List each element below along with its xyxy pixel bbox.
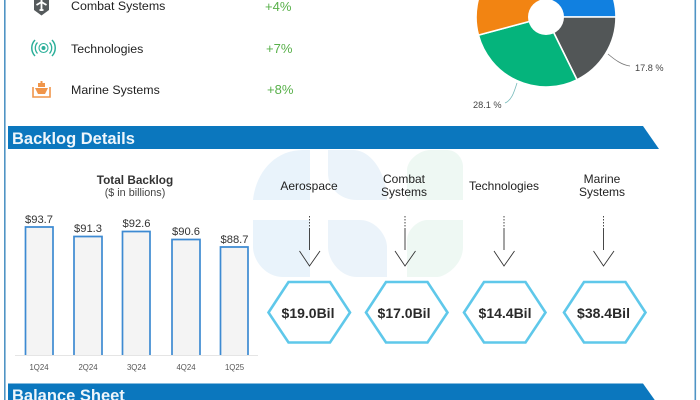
row: Marine Systems (33, 81, 294, 97)
bar: 1Q24 (25, 214, 53, 372)
hexagon value: $14.4Bil (479, 305, 531, 321)
icon: ship (33, 81, 50, 97)
column: Technologies (464, 179, 546, 342)
row: Marine Systems: Marine Systems (71, 83, 160, 97)
row: Marine Systems: +8% (267, 82, 294, 97)
icon: signal (32, 40, 55, 56)
bar: 1Q24: $93.7 (25, 214, 53, 226)
row: Combat Systems (34, 0, 292, 16)
hexagon value: $19.0Bil (282, 305, 334, 321)
icon: shield with plane (34, 0, 49, 16)
column: Combat Systems (366, 172, 448, 342)
bar chart: total backlog (15, 173, 258, 372)
heading: Balance Sheet (8, 384, 659, 400)
bar: 4Q24 (172, 226, 200, 372)
column: Marine Systems (564, 172, 646, 342)
arrow (494, 216, 514, 266)
bar: 1Q25 (220, 234, 248, 372)
column: Marine Systems: Marine (584, 172, 621, 186)
bar: 1Q25: $88.7 (220, 234, 248, 246)
chart title: Total Backlog (97, 173, 173, 187)
bar: 1Q24: 1Q24 (29, 363, 49, 372)
hexagon value (464, 282, 546, 342)
column: Combat Systems: Systems (381, 185, 427, 199)
pie chart: segment share (473, 0, 664, 110)
bar: 4Q24: $90.6 (172, 226, 200, 238)
column: Aerospace: Aerospace (280, 179, 338, 193)
chart title: ($ in billions) (105, 187, 165, 199)
column: Marine Systems: Systems (579, 185, 625, 199)
column: Combat Systems: Combat (383, 172, 426, 186)
slice: green 28.1% (478, 17, 577, 87)
arrow (594, 216, 614, 266)
arrow (300, 216, 320, 266)
watermark: background leaf logo (253, 150, 463, 277)
chart title (97, 173, 173, 199)
row: Technologies (32, 40, 293, 56)
hexagon value (366, 282, 448, 342)
callout: 17.8 % (608, 54, 664, 73)
hexagon value: $38.4Bil (577, 305, 630, 321)
bar: 3Q24 (122, 218, 150, 372)
arrow (395, 216, 416, 266)
bar: 3Q24: 3Q24 (127, 363, 147, 372)
slice: orange (476, 0, 546, 35)
heading: Backlog Details (8, 126, 659, 149)
hexagon value (268, 282, 350, 342)
column: Aerospace (268, 179, 350, 342)
row: Technologies: Technologies (71, 42, 143, 56)
bar: 2Q24 (74, 223, 102, 372)
bar: 3Q24: $92.6 (122, 218, 150, 230)
slice: blue (546, 0, 616, 17)
slice: gray 17.8% (546, 17, 616, 80)
bar: 2Q24: $91.3 (74, 223, 102, 235)
column: Technologies: Technologies (469, 179, 539, 193)
callout: 28.1 %: 28.1 % (473, 100, 502, 110)
callout: 17.8 %: 17.8 % (635, 63, 664, 73)
hexagon value (564, 282, 646, 342)
heading: Backlog Details: Backlog Details (12, 130, 135, 148)
bar: 2Q24: 2Q24 (78, 363, 98, 372)
row: Technologies: +7% (266, 41, 293, 56)
bar: 1Q25: 1Q25 (225, 363, 245, 372)
hexagon value: $17.0Bil (378, 305, 430, 321)
callout: 28.1 % (473, 83, 517, 110)
bar: 4Q24: 4Q24 (176, 363, 196, 372)
